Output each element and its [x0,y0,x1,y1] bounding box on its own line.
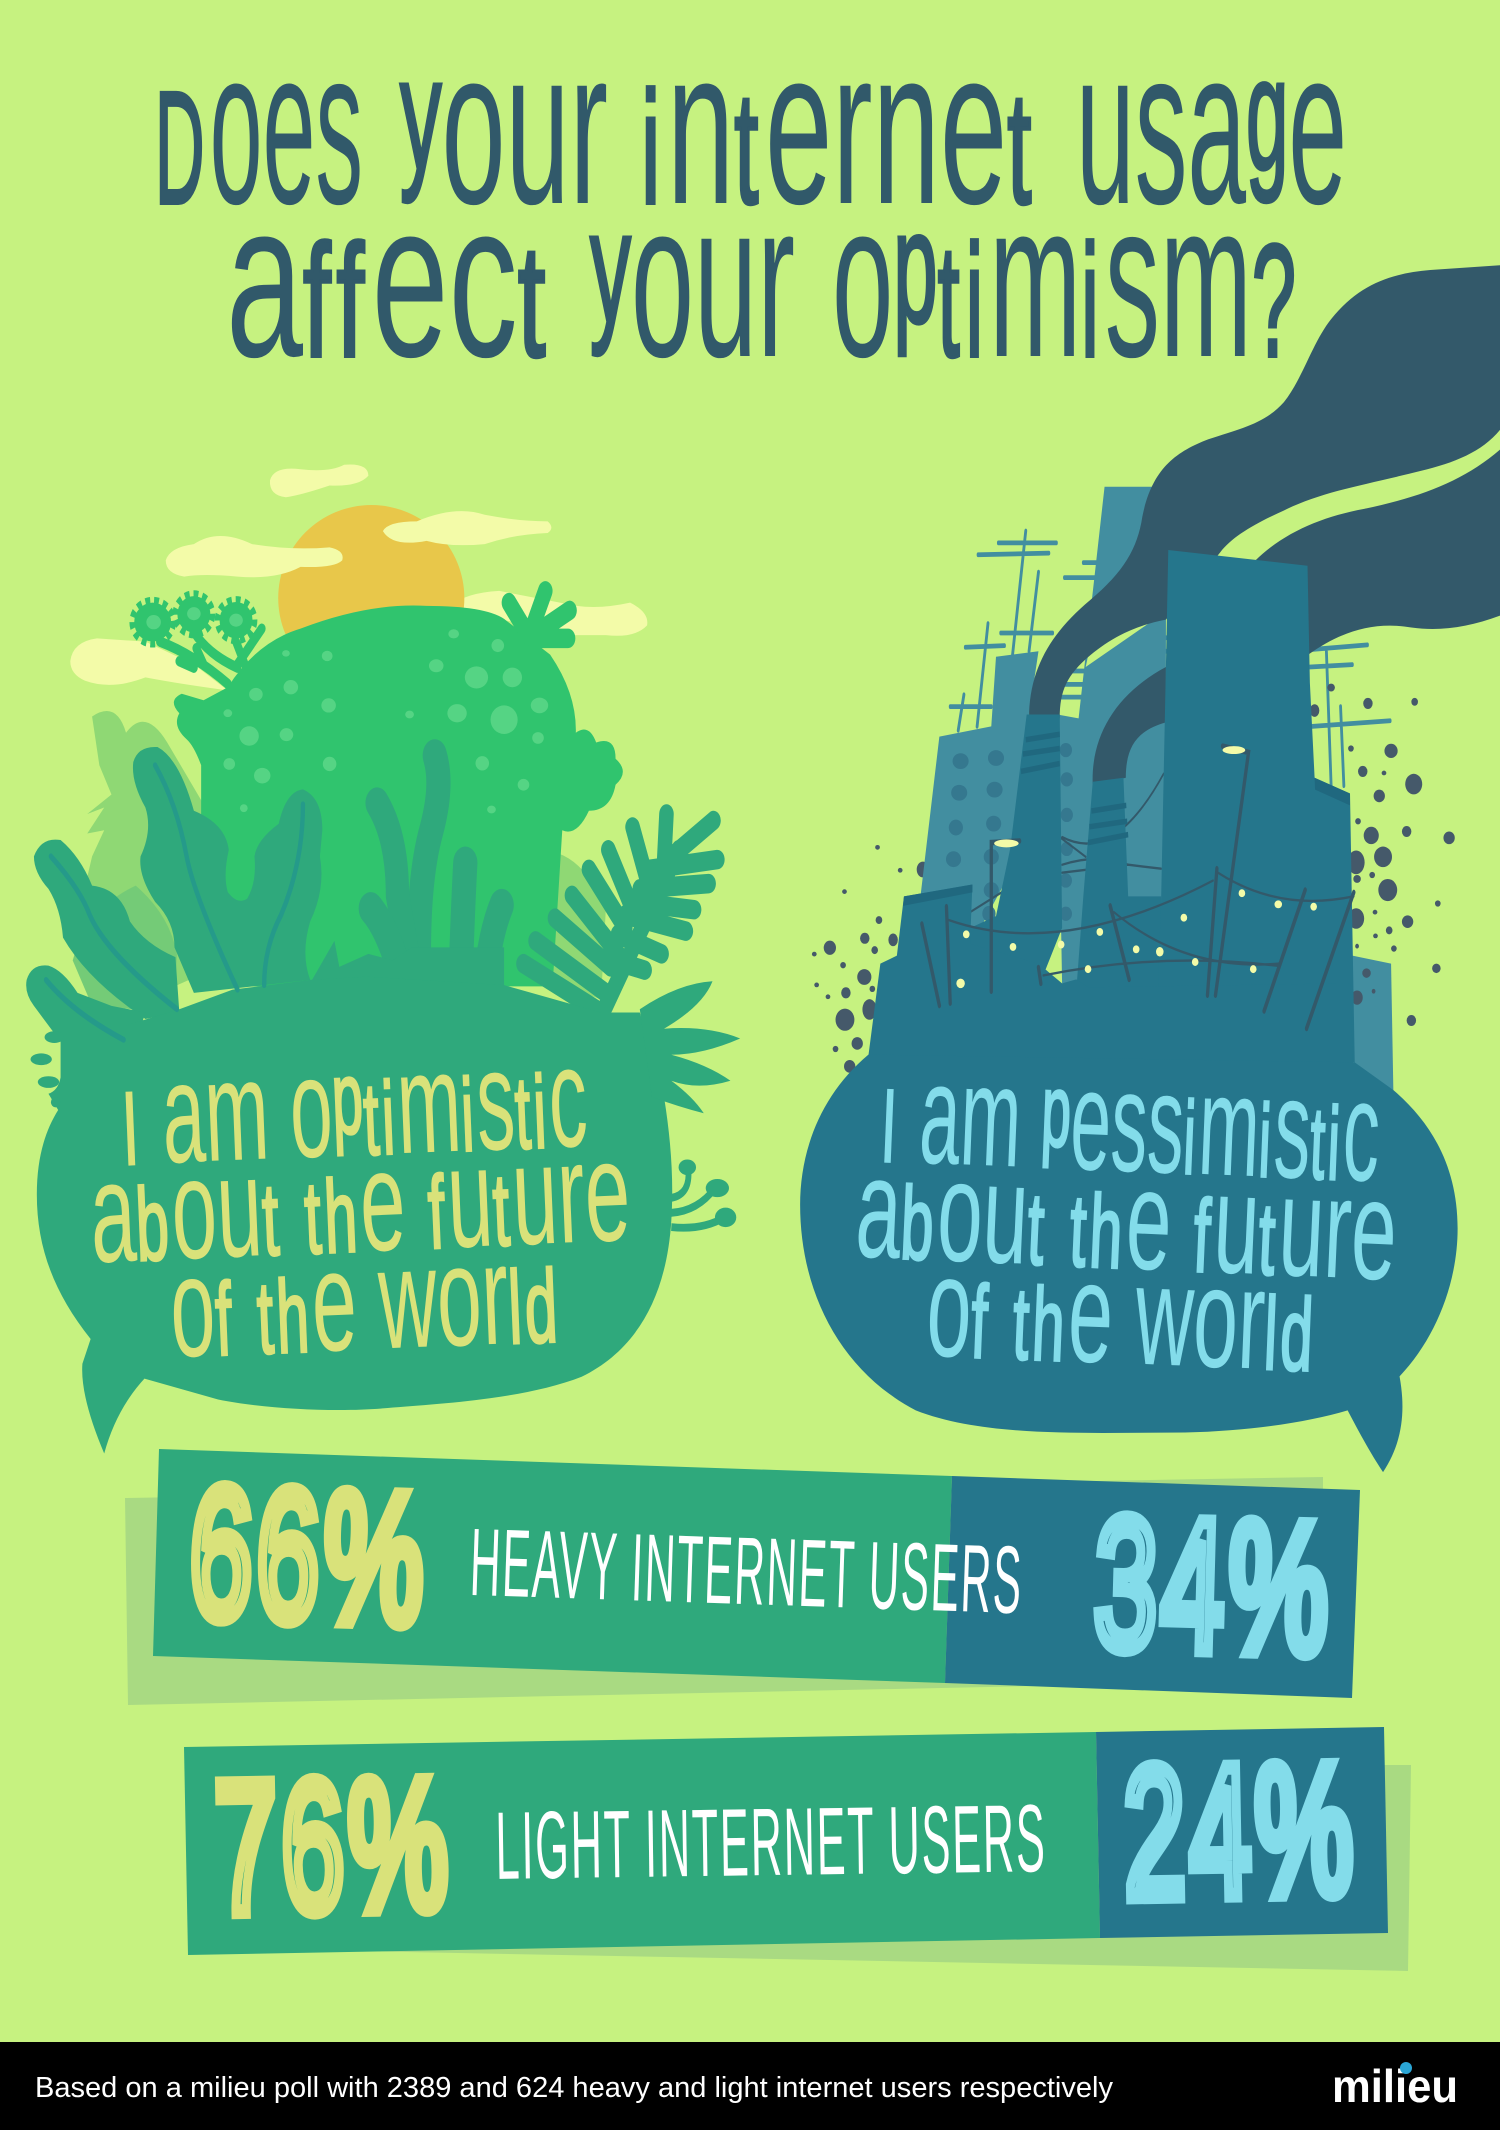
bar: light internet users: 76% [213,1741,454,1952]
street poles and lamps [922,746,1354,1028]
text block: optimistic statement: about the future [87,1112,633,1293]
bar: heavy internet users [125,1449,1360,1705]
fern [523,814,717,1012]
title: Does [155,3,363,251]
antennas [950,531,1390,786]
text block: pessimistic statement: I am pessimistic [879,1033,1383,1212]
footer source note: Based on a milieu poll with 2389 and 624 heavy and light internet users respectively [35,2072,1113,2104]
hill dots [223,629,548,813]
back building [1352,956,1393,1094]
text block: optimistic statement: of the world [167,1213,563,1388]
text block: optimistic statement [87,1018,633,1388]
flower sprig [132,594,262,684]
windows [946,743,1073,922]
dark particles [812,684,1455,1073]
sun [278,505,464,691]
text block: optimistic statement: I am optimistic [119,1018,590,1195]
footer bar [0,2042,1500,2130]
lights [956,746,1317,988]
logo: milieu: milieu [1332,2060,1458,2112]
leaf veins [46,765,303,1040]
title: optimism? [832,156,1302,404]
light buildings [920,487,1166,983]
title: your [590,156,795,404]
tendrils [371,755,502,986]
title [155,3,1347,404]
text block: pessimistic statement: about the future [853,1128,1400,1311]
bar: light internet users [184,1726,1411,1971]
smoke plumes [1029,265,1500,786]
title: usage [1076,3,1347,251]
dark buildings, chimneys and speech bubble [800,550,1458,1472]
panel: optimistic nature illustration [26,464,740,1453]
clouds over sun [166,511,551,577]
hill top-right foliage [509,591,570,638]
panel: pessimistic city illustration [800,265,1500,1472]
bar: heavy internet users: 66% [187,1449,431,1664]
background wires [970,774,1164,912]
chimney bands [1021,734,1128,843]
title: internet [641,3,1038,251]
text block: pessimistic statement [853,1033,1400,1402]
string lights wires [949,873,1354,975]
leaves and speech bubble [26,747,740,1453]
back bush [76,711,606,1012]
text block: pessimistic statement: of the world [924,1227,1320,1402]
green hill [174,606,623,986]
clouds behind [70,464,647,690]
mushrooms [671,1169,725,1228]
title: affect [226,156,553,404]
title: your [400,3,608,251]
bar: heavy internet users: 34% [1092,1480,1335,1693]
